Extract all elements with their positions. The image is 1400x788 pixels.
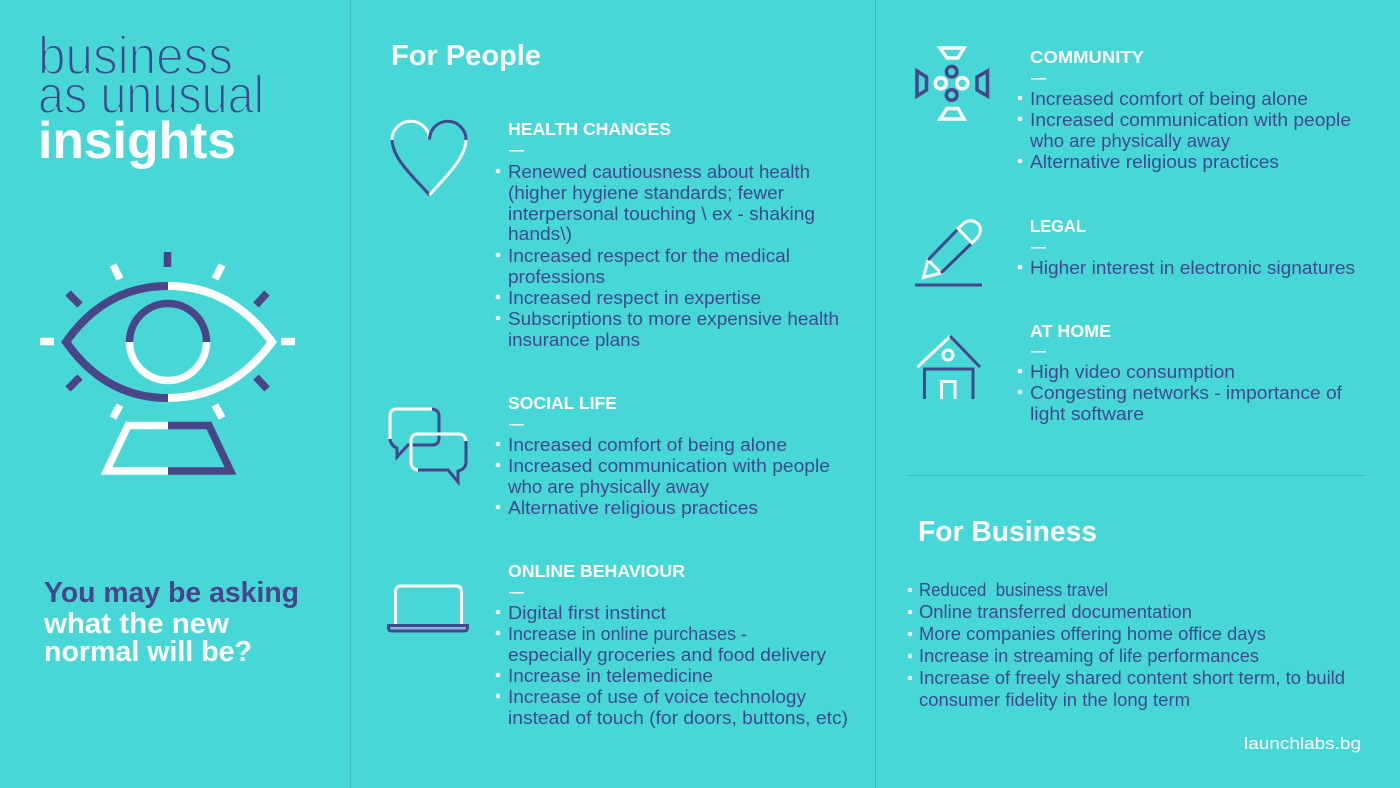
- section: online behaviour: ONLINE BEHAVIOUR: [508, 561, 685, 581]
- section: at home: AT HOME: [1030, 321, 1111, 341]
- title: business: [38, 26, 233, 86]
- section: health changes: (higher hygiene standards; fewer: [508, 182, 784, 203]
- section: for business: Increase of freely shared content short term, to build: [919, 667, 1345, 688]
- section: community: who are physically away: [1029, 130, 1231, 151]
- section: health changes: professions: [508, 266, 605, 287]
- section: social life: Increased communication with people: [508, 455, 830, 476]
- section: health changes: insurance plans: [508, 329, 640, 350]
- question callout: [43, 577, 299, 668]
- section: health changes: interpersonal touching \ ex - shaking: [508, 203, 815, 224]
- section: at home: light software: [1030, 403, 1144, 424]
- section: online behaviour: instead of touch (for doors, buttons, etc): [508, 707, 848, 728]
- section: at home: Congesting networks - importance of: [1030, 382, 1343, 403]
- section: for business: Online transferred documentation: [919, 601, 1192, 622]
- section: online behaviour: especially groceries and food delivery: [508, 644, 827, 665]
- question callout: normal will be?: [44, 636, 252, 668]
- title: as unusual: [38, 65, 264, 125]
- section: online behaviour: [496, 561, 848, 728]
- section: health changes: Increased respect in expertise: [508, 287, 761, 308]
- section: for business: More companies offering home office days: [919, 623, 1266, 644]
- section: social life: SOCIAL LIFE: [508, 393, 617, 413]
- section: for business: Reduced business travel: [919, 579, 1108, 600]
- section: for business: consumer fidelity in the long term: [919, 689, 1190, 710]
- section: community: Increased comfort of being alone: [1030, 88, 1308, 109]
- section: community: Increased communication with people: [1030, 109, 1351, 130]
- question callout: You may be asking: [44, 577, 299, 609]
- icon: house: [918, 336, 980, 399]
- section: health changes: Renewed cautiousness about health: [508, 161, 810, 182]
- section: health changes: [496, 119, 839, 350]
- icon: heart: [392, 121, 466, 195]
- section: legal: LEGAL: [1030, 216, 1086, 236]
- section: health changes: Increased respect for the medical: [508, 245, 790, 266]
- section: legal: Higher interest in electronic signatures: [1030, 257, 1355, 278]
- section: community: COMMUNITY: [1030, 47, 1144, 67]
- panel: left column: [38, 26, 299, 668]
- section: legal: [1018, 216, 1355, 278]
- title: [38, 26, 264, 170]
- icon: speech bubbles: [390, 409, 466, 482]
- section: health changes: hands\): [508, 223, 572, 244]
- section: health changes: Subscriptions to more expensive health: [508, 308, 839, 329]
- section: community: [1018, 47, 1351, 172]
- section: social life: who are physically away: [507, 476, 710, 497]
- question callout: what the new: [43, 608, 229, 640]
- section: for business: For Business: [918, 516, 1097, 548]
- section: health changes: HEALTH CHANGES: [508, 119, 671, 139]
- icon: laptop: [388, 586, 468, 631]
- section: online behaviour: Increase of use of voice technology: [508, 686, 807, 707]
- section: online behaviour: Increase in online purchases -: [508, 623, 747, 644]
- section: community: Alternative religious practices: [1030, 151, 1279, 172]
- section: social life: [496, 393, 830, 518]
- panel: for people: [388, 40, 848, 728]
- icon: community: [917, 48, 988, 119]
- heading: for people: For People: [391, 40, 541, 72]
- panel: right column: [908, 47, 1361, 753]
- website credit: launchlabs.bg: [1244, 734, 1361, 753]
- icon: pencil: [915, 221, 982, 285]
- section: social life: Increased comfort of being alone: [508, 434, 787, 455]
- section: online behaviour: Increase in telemedicine: [508, 665, 713, 686]
- section: for business: [908, 516, 1345, 710]
- section: online behaviour: Digital first instinct: [508, 602, 666, 623]
- title: insights: [38, 112, 236, 170]
- section: social life: Alternative religious practices: [508, 497, 758, 518]
- section: for business: Increase in streaming of life performances: [919, 645, 1259, 666]
- section: at home: High video consumption: [1030, 361, 1235, 382]
- icon: eye on a stand: [40, 252, 295, 471]
- section: at home: [1018, 321, 1343, 424]
